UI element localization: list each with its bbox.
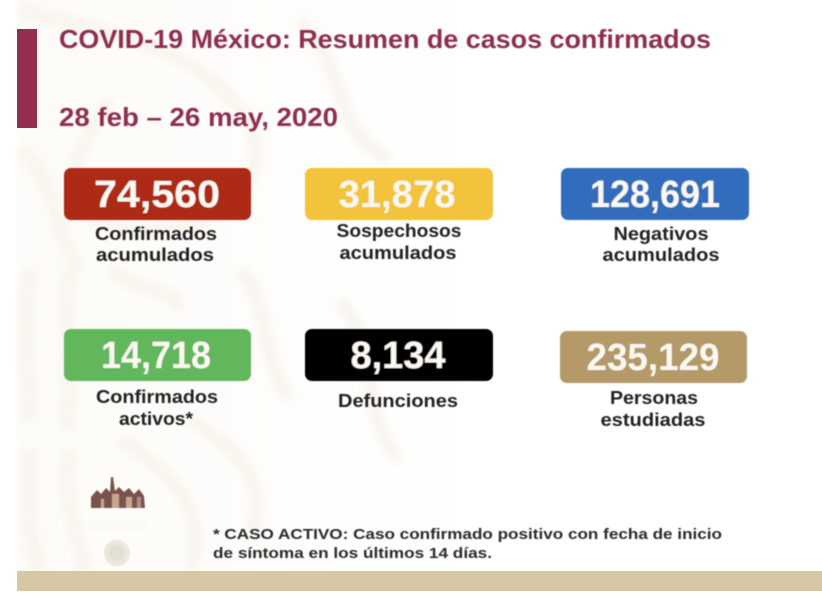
panel: confirmados activos: activos*	[119, 409, 193, 429]
panel: sospechosos acumulados	[305, 168, 493, 263]
footer bar	[17, 571, 822, 591]
panel: personas estudiadas: Personas	[610, 388, 698, 408]
panel: negativos acumulados: 128,691	[590, 174, 720, 216]
panel: confirmados acumulados	[64, 168, 251, 265]
panel: confirmados activos: Confirmados	[96, 387, 218, 407]
footnote: * CASO ACTIVO: Caso confirmado positivo con fecha de inicio	[213, 526, 722, 543]
footnote: de síntoma en los últimos 14 días.	[213, 545, 492, 562]
panel: confirmados activos	[64, 329, 251, 429]
footnote	[213, 526, 722, 562]
title: COVID-19 México: Resumen de casos confirmados	[59, 24, 711, 54]
panel: sospechosos acumulados: Sospechosos	[336, 221, 462, 241]
date range: 28 feb – 26 may, 2020	[59, 102, 338, 132]
panel: confirmados acumulados: 74,560	[94, 174, 220, 216]
panel: negativos acumulados: Negativos	[614, 224, 708, 244]
icon: faint wordmark	[88, 521, 148, 530]
title accent bar	[17, 29, 37, 128]
panel: confirmados acumulados: acumulados	[96, 245, 214, 265]
panel: sospechosos acumulados: acumulados	[340, 243, 456, 263]
panel: negativos acumulados: acumulados	[602, 245, 720, 265]
panel: confirmados activos: 14,718	[101, 335, 211, 377]
panel: confirmados acumulados: Confirmados	[95, 224, 217, 244]
panel: personas estudiadas: 235,129	[586, 337, 720, 379]
icon: group of historical figures	[91, 477, 145, 508]
panel: personas estudiadas	[560, 331, 747, 430]
panel: personas estudiadas: estudiadas	[600, 410, 706, 430]
panel: sospechosos acumulados: 31,878	[338, 174, 456, 216]
panel: defunciones: Defunciones	[338, 391, 458, 411]
panel: negativos acumulados	[561, 168, 749, 265]
panel: defunciones: 8,134	[350, 335, 446, 377]
panel: defunciones	[305, 329, 493, 411]
icon: national seal	[104, 540, 130, 566]
